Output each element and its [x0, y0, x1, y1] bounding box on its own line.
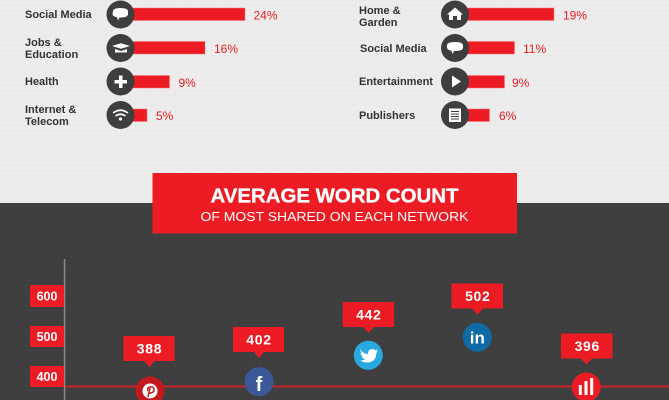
axis label 400 [30, 366, 64, 387]
row: Internet & Telecom 5%: Telecom [25, 116, 69, 128]
panel: right category bars [359, 0, 587, 129]
point: LinkedIn 502: in [470, 328, 485, 348]
banner: average word count heading [152, 173, 517, 234]
point: all networks average 396 [561, 334, 612, 400]
row: Entertainment 9% [359, 68, 530, 96]
axis label 600 [30, 285, 64, 307]
axis label 500: 500 [37, 330, 57, 344]
row: Entertainment 9%: Entertainment [359, 76, 433, 88]
axis label 600: 600 [37, 290, 57, 304]
baseline at 400 [65, 386, 669, 388]
point: Facebook 402: f [256, 374, 263, 396]
title: AVERAGE WORD COUNT [210, 184, 459, 208]
point: LinkedIn 502: 502 [465, 288, 491, 304]
point: all networks average 396: 396 [575, 338, 600, 354]
chart: word count by network [30, 259, 669, 400]
point: LinkedIn 502 [452, 284, 503, 352]
row: Social Media 11%: Social Media [360, 43, 428, 55]
row: Health 9%: 9% [178, 76, 196, 90]
row: Internet & Telecom 5%: 5% [156, 109, 174, 123]
row: Home & Garden 19% [359, 0, 587, 29]
vertical axis [64, 259, 65, 400]
axis label 400: 400 [37, 370, 57, 384]
row: Jobs & Education 16%: Education [25, 49, 78, 61]
row: Jobs & Education 16% [25, 34, 238, 62]
row: Internet & Telecom 5%: Internet & [25, 104, 76, 116]
row: Home & Garden 19%: 19% [563, 8, 587, 22]
point: Pinterest 388: 388 [137, 340, 162, 356]
row: Health 9%: Health [25, 76, 59, 88]
row: Social Media 11%: 11% [523, 42, 546, 56]
row: Home & Garden 19%: Home & [359, 5, 401, 17]
row: Publishers 6%: 6% [499, 109, 517, 123]
point: Twitter 442: 442 [356, 306, 382, 322]
row: Publishers 6% [359, 101, 517, 129]
row: Social Media 24%: Social Media [25, 9, 93, 21]
point: Twitter 442 [343, 302, 394, 370]
row: Social Media 24%: 24% [254, 8, 278, 22]
point: Pinterest 388 [124, 336, 174, 400]
subtitle: OF MOST SHARED ON EACH NETWORK [200, 209, 469, 224]
row: Social Media 24% [25, 0, 278, 28]
row: Entertainment 9%: 9% [512, 76, 530, 90]
row: Social Media 11% [360, 34, 546, 62]
panel: left category bars [25, 0, 278, 129]
point: Facebook 402 [233, 327, 284, 396]
point: Facebook 402: 402 [246, 332, 272, 348]
row: Jobs & Education 16%: Jobs & [25, 37, 62, 49]
axis label 500 [30, 326, 64, 347]
row: Health 9% [25, 68, 196, 96]
row: Home & Garden 19%: Garden [359, 17, 398, 29]
row: Jobs & Education 16%: 16% [214, 42, 238, 56]
row: Publishers 6%: Publishers [359, 110, 415, 122]
row: Internet & Telecom 5% [25, 101, 174, 129]
